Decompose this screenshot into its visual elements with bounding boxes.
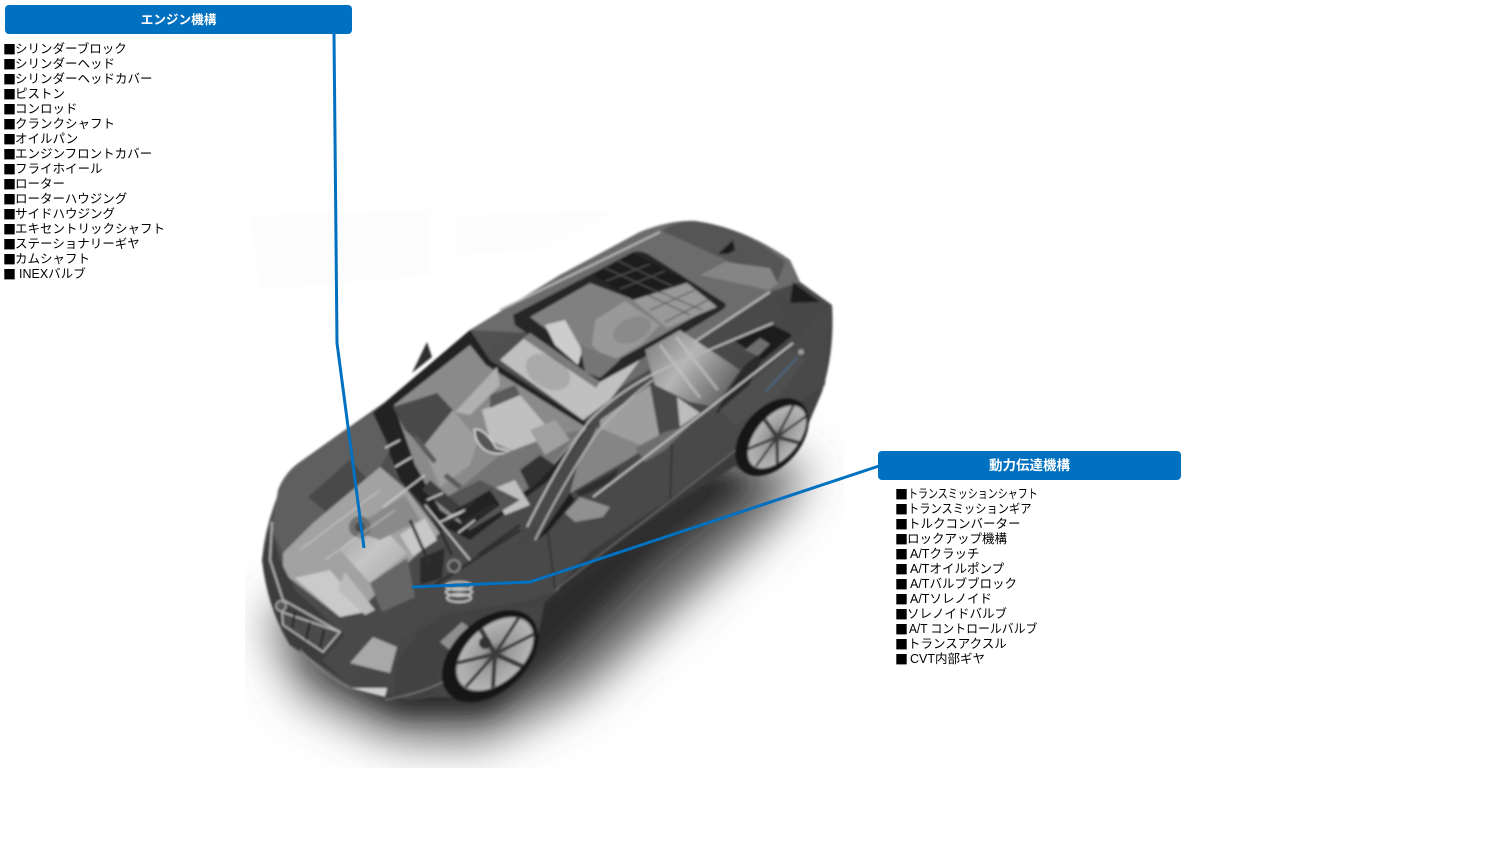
list: drivetrain parts: ■: [895, 574, 908, 593]
front fender: [544, 592, 558, 602]
list: drivetrain parts: ■: [895, 649, 908, 668]
list: drivetrain parts: A/Tソレノイド: [910, 592, 992, 606]
list: drivetrain parts: A/Tバルブブロック: [910, 577, 1017, 591]
list: engine parts: ■: [3, 174, 16, 193]
windshield interior: [393, 345, 587, 530]
leader line: engine: [334, 34, 364, 548]
windshield frame: [373, 330, 590, 540]
solar panel grid: [593, 253, 717, 328]
list: engine parts: エキセントリックシャフト: [15, 222, 165, 236]
list: engine parts: ■: [3, 69, 16, 88]
list: drivetrain parts: ■: [895, 484, 908, 503]
list: drivetrain parts: A/T コントロールバルブ: [909, 622, 1037, 636]
list: engine parts: ■: [3, 114, 16, 133]
list: engine parts: エンジンフロントカバー: [15, 147, 152, 161]
list: engine parts: ■: [3, 204, 16, 223]
chrome lines: [300, 232, 793, 700]
car body: [261, 280, 834, 700]
list: drivetrain parts: A/Tオイルポンプ: [910, 562, 1004, 576]
list: drivetrain parts: ■: [895, 559, 908, 578]
list: engine parts: ■: [3, 129, 16, 148]
windshield upper glass: [500, 333, 640, 420]
rear side components: [720, 386, 749, 411]
heading: power transmission mechanism: 動力伝達機構: [989, 458, 1070, 473]
heading: engine mechanism: エンジン機構: [141, 13, 216, 27]
car shadow: [268, 440, 810, 740]
list: engine parts: オイルパン: [15, 132, 78, 146]
hood: [272, 413, 390, 553]
list: engine parts: ■: [3, 219, 16, 238]
list: drivetrain parts: ■: [895, 604, 908, 623]
front fascia and grille: [262, 522, 350, 685]
list: drivetrain parts: ■: [895, 589, 908, 608]
list: drivetrain parts: CVT内部ギヤ: [910, 652, 985, 666]
list: engine parts: フライホイール: [15, 162, 103, 176]
list: drivetrain parts: トルクコンバーター: [908, 517, 1021, 531]
engine bay: [283, 440, 520, 617]
list: drivetrain parts: トランスアクスル: [908, 637, 1007, 651]
list: engine parts: ■: [3, 264, 16, 283]
list: engine parts: カムシャフト: [15, 252, 90, 266]
door side body: [558, 380, 827, 584]
list: drivetrain parts: ■: [895, 619, 908, 638]
list: drivetrain parts: トランスミッションギア: [908, 502, 1032, 516]
list: engine parts: ■: [3, 144, 16, 163]
front wheel: [441, 610, 539, 703]
car artwork: [262, 221, 833, 720]
heading: power transmission mechanism: [878, 451, 1181, 480]
rear wheel: [734, 398, 810, 478]
list: drivetrain parts: ■: [895, 529, 908, 548]
list: drivetrain parts: ■: [895, 499, 908, 518]
list: drivetrain parts: A/Tクラッチ: [910, 547, 979, 561]
leader line: drivetrain: [412, 466, 879, 587]
list: engine parts: INEXバルブ: [19, 267, 86, 281]
roof: [470, 221, 800, 400]
side interior seats: [570, 372, 700, 497]
heading: engine mechanism: [5, 5, 352, 34]
list: engine parts: シリンダーブロック: [15, 42, 127, 56]
list: engine parts: ■: [3, 39, 16, 58]
list: engine parts: ■: [3, 189, 16, 208]
list: engine parts: クランクシャフト: [15, 117, 115, 131]
list: engine parts: ■: [3, 99, 16, 118]
list: engine parts: コンロッド: [15, 102, 78, 116]
list: engine parts: ステーショナリーギヤ: [15, 237, 140, 251]
list: drivetrain parts: ■: [895, 544, 908, 563]
side mirror: [412, 342, 432, 373]
list: engine parts: ■: [3, 234, 16, 253]
list: engine parts: ピストン: [15, 87, 65, 101]
list: drivetrain parts: ソレノイドバルブ: [907, 607, 1007, 621]
door armrest: [565, 497, 610, 522]
list: engine parts: ■: [3, 249, 16, 268]
list: drivetrain parts: トランスミッションシャフト: [908, 487, 1038, 501]
list: drivetrain parts: ■: [895, 514, 908, 533]
headlight: [350, 637, 397, 673]
rear seats: [545, 301, 660, 378]
list: engine parts: シリンダーヘッドカバー: [15, 72, 153, 86]
suspension spring: [446, 560, 472, 602]
lower lamp: [350, 688, 387, 697]
list: drivetrain parts: [895, 484, 1038, 668]
list: engine parts: ■: [3, 54, 16, 73]
list: engine parts: サイドハウジング: [15, 207, 115, 221]
rear hatch glass: [790, 282, 820, 303]
illustration: transparent car cutaway: [245, 34, 878, 768]
list: engine parts: ローターハウジング: [15, 192, 127, 206]
list: engine parts: ■: [3, 84, 16, 103]
list: engine parts: [3, 39, 165, 283]
sunroof: [513, 251, 726, 382]
fuel tank: [645, 330, 770, 415]
list: engine parts: ローター: [15, 177, 65, 191]
list: drivetrain parts: ロックアップ機構: [907, 532, 1007, 546]
faint background marks: [250, 210, 620, 290]
list: drivetrain parts: ■: [895, 634, 908, 653]
rear quarter window: [733, 325, 793, 360]
list: engine parts: シリンダーヘッド: [15, 57, 115, 71]
shark fin antenna: [718, 240, 735, 254]
list: engine parts: ■: [3, 159, 16, 178]
